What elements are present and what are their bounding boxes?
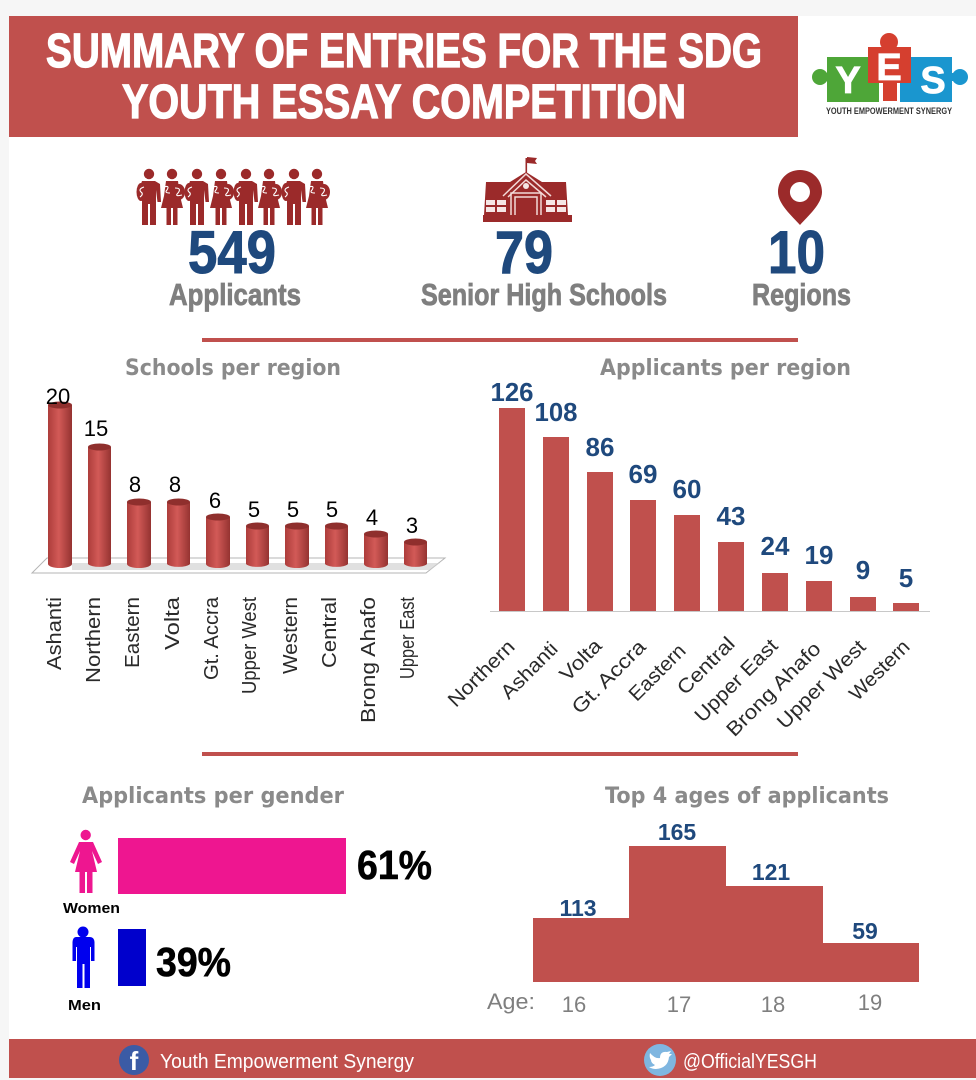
value labels: 5: [287, 497, 299, 522]
icon: group of students: [136, 169, 330, 225]
age axis labels: 19: [858, 990, 882, 1015]
logo: Youth Empowerment Synergy: S: [920, 60, 946, 102]
stat: regions: Regions: [752, 277, 851, 312]
icon: school building: [483, 157, 572, 222]
region labels: Upper East: [397, 597, 419, 679]
logo: Youth Empowerment Synergy: Y: [835, 60, 861, 102]
chart: applicants per region: [444, 377, 930, 741]
value labels: 5: [899, 563, 913, 593]
value: 39%: 39%: [156, 939, 231, 985]
title banner: YOUTH ESSAY COMPETITION: [122, 76, 686, 129]
value labels: 15: [84, 416, 108, 441]
stat: applicants: 549: [188, 219, 276, 286]
label: women: Women: [63, 900, 120, 917]
region labels: Western: [280, 597, 302, 674]
age axis labels: 16: [562, 992, 586, 1017]
bar: men: [118, 929, 146, 986]
value labels: 113: [559, 895, 597, 921]
value labels: 9: [856, 555, 870, 585]
value labels: 126: [490, 377, 534, 407]
logo: Youth Empowerment Synergy: YOUTH EMPOWERMENT SYNERGY: [826, 106, 952, 116]
bars: [499, 408, 919, 611]
value labels: [559, 819, 878, 944]
region labels: Eastern: [625, 640, 691, 706]
region labels: Central: [319, 597, 341, 668]
region labels: Northern: [83, 597, 105, 683]
age axis labels: [487, 989, 882, 1017]
stat: senior high schools: [421, 157, 667, 312]
icon: map pin: [778, 170, 822, 225]
region labels: [44, 596, 419, 723]
age axis labels: 18: [761, 992, 785, 1017]
region labels: Eastern: [122, 597, 144, 668]
age axis labels: Age:: [487, 989, 535, 1014]
heading: applicants per region: Applicants per region: [600, 356, 851, 381]
region labels: Upper West: [239, 597, 261, 694]
chart: top 4 ages histogram: [487, 819, 919, 1017]
region labels: Brong Ahafo: [358, 597, 380, 723]
region labels: [444, 633, 915, 741]
region labels: Gt. Accra: [568, 635, 651, 719]
region labels: Upper West: [773, 636, 871, 734]
region labels: Volta: [162, 596, 184, 650]
chart floor: [32, 558, 445, 573]
icon: facebook: f: [130, 1046, 139, 1076]
stat: applicants: [136, 169, 330, 312]
heading: top 4 ages: Top 4 ages of applicants: [605, 784, 889, 809]
value labels: 8: [169, 472, 181, 497]
region labels: Gt. Accra: [201, 596, 223, 680]
cylinder bars: [48, 402, 427, 568]
stat: senior high schools: Senior High Schools: [421, 277, 667, 312]
value labels: 8: [129, 472, 141, 497]
chart: schools per region: [32, 384, 445, 723]
chart: applicants per gender: [63, 830, 432, 1014]
region labels: Ashanti: [497, 638, 563, 704]
region labels: Ashanti: [44, 597, 66, 670]
icon: twitter: [644, 1044, 676, 1076]
footer text: twitter: @OfficialYESGH: [683, 1051, 817, 1073]
region labels: Western: [845, 636, 915, 705]
value labels: [490, 377, 913, 593]
value labels: 5: [248, 497, 260, 522]
title banner: [9, 16, 798, 137]
value labels: 4: [366, 505, 378, 530]
bar: women: [118, 838, 346, 894]
value labels: 3: [406, 513, 418, 538]
heading: schools per region: Schools per region: [125, 356, 341, 381]
value: 61%: 61%: [357, 842, 432, 888]
value labels: 19: [805, 540, 833, 570]
icon: man: [72, 926, 94, 988]
value labels: 24: [761, 531, 790, 561]
stat: regions: 10: [768, 219, 825, 286]
value labels: 69: [629, 459, 657, 489]
region labels: Volta: [556, 634, 607, 686]
value labels: 86: [586, 432, 614, 462]
stat: regions: [752, 170, 851, 312]
value labels: 165: [658, 819, 696, 845]
region labels: Northern: [444, 636, 520, 712]
logo: Youth Empowerment Synergy: E: [876, 47, 902, 89]
region labels: Upper East: [691, 635, 783, 727]
icon: facebook: [119, 1045, 149, 1076]
value labels: 121: [752, 859, 790, 885]
icon: woman: [70, 830, 102, 893]
heading: applicants per gender: Applicants per gender: [82, 784, 344, 809]
stat: senior high schools: 79: [495, 219, 553, 286]
stat: applicants: Applicants: [169, 277, 301, 312]
region labels: Brong Ahafo: [722, 638, 826, 741]
label: men: Men: [68, 997, 101, 1014]
value labels: 60: [673, 474, 701, 504]
value labels: [46, 384, 418, 538]
title banner: SUMMARY OF ENTRIES FOR THE SDG: [46, 25, 762, 78]
footer text: facebook: Youth Empowerment Synergy: [160, 1051, 414, 1073]
value labels: 43: [717, 501, 745, 531]
value labels: 5: [326, 497, 338, 522]
footer bar: [9, 1039, 976, 1078]
region labels: Central: [673, 633, 740, 699]
value labels: 108: [534, 397, 578, 427]
value labels: 59: [852, 918, 878, 944]
value labels: 6: [209, 488, 221, 513]
logo: Youth Empowerment Synergy: [812, 33, 968, 116]
value labels: 20: [46, 384, 70, 409]
age axis labels: 17: [667, 992, 691, 1017]
